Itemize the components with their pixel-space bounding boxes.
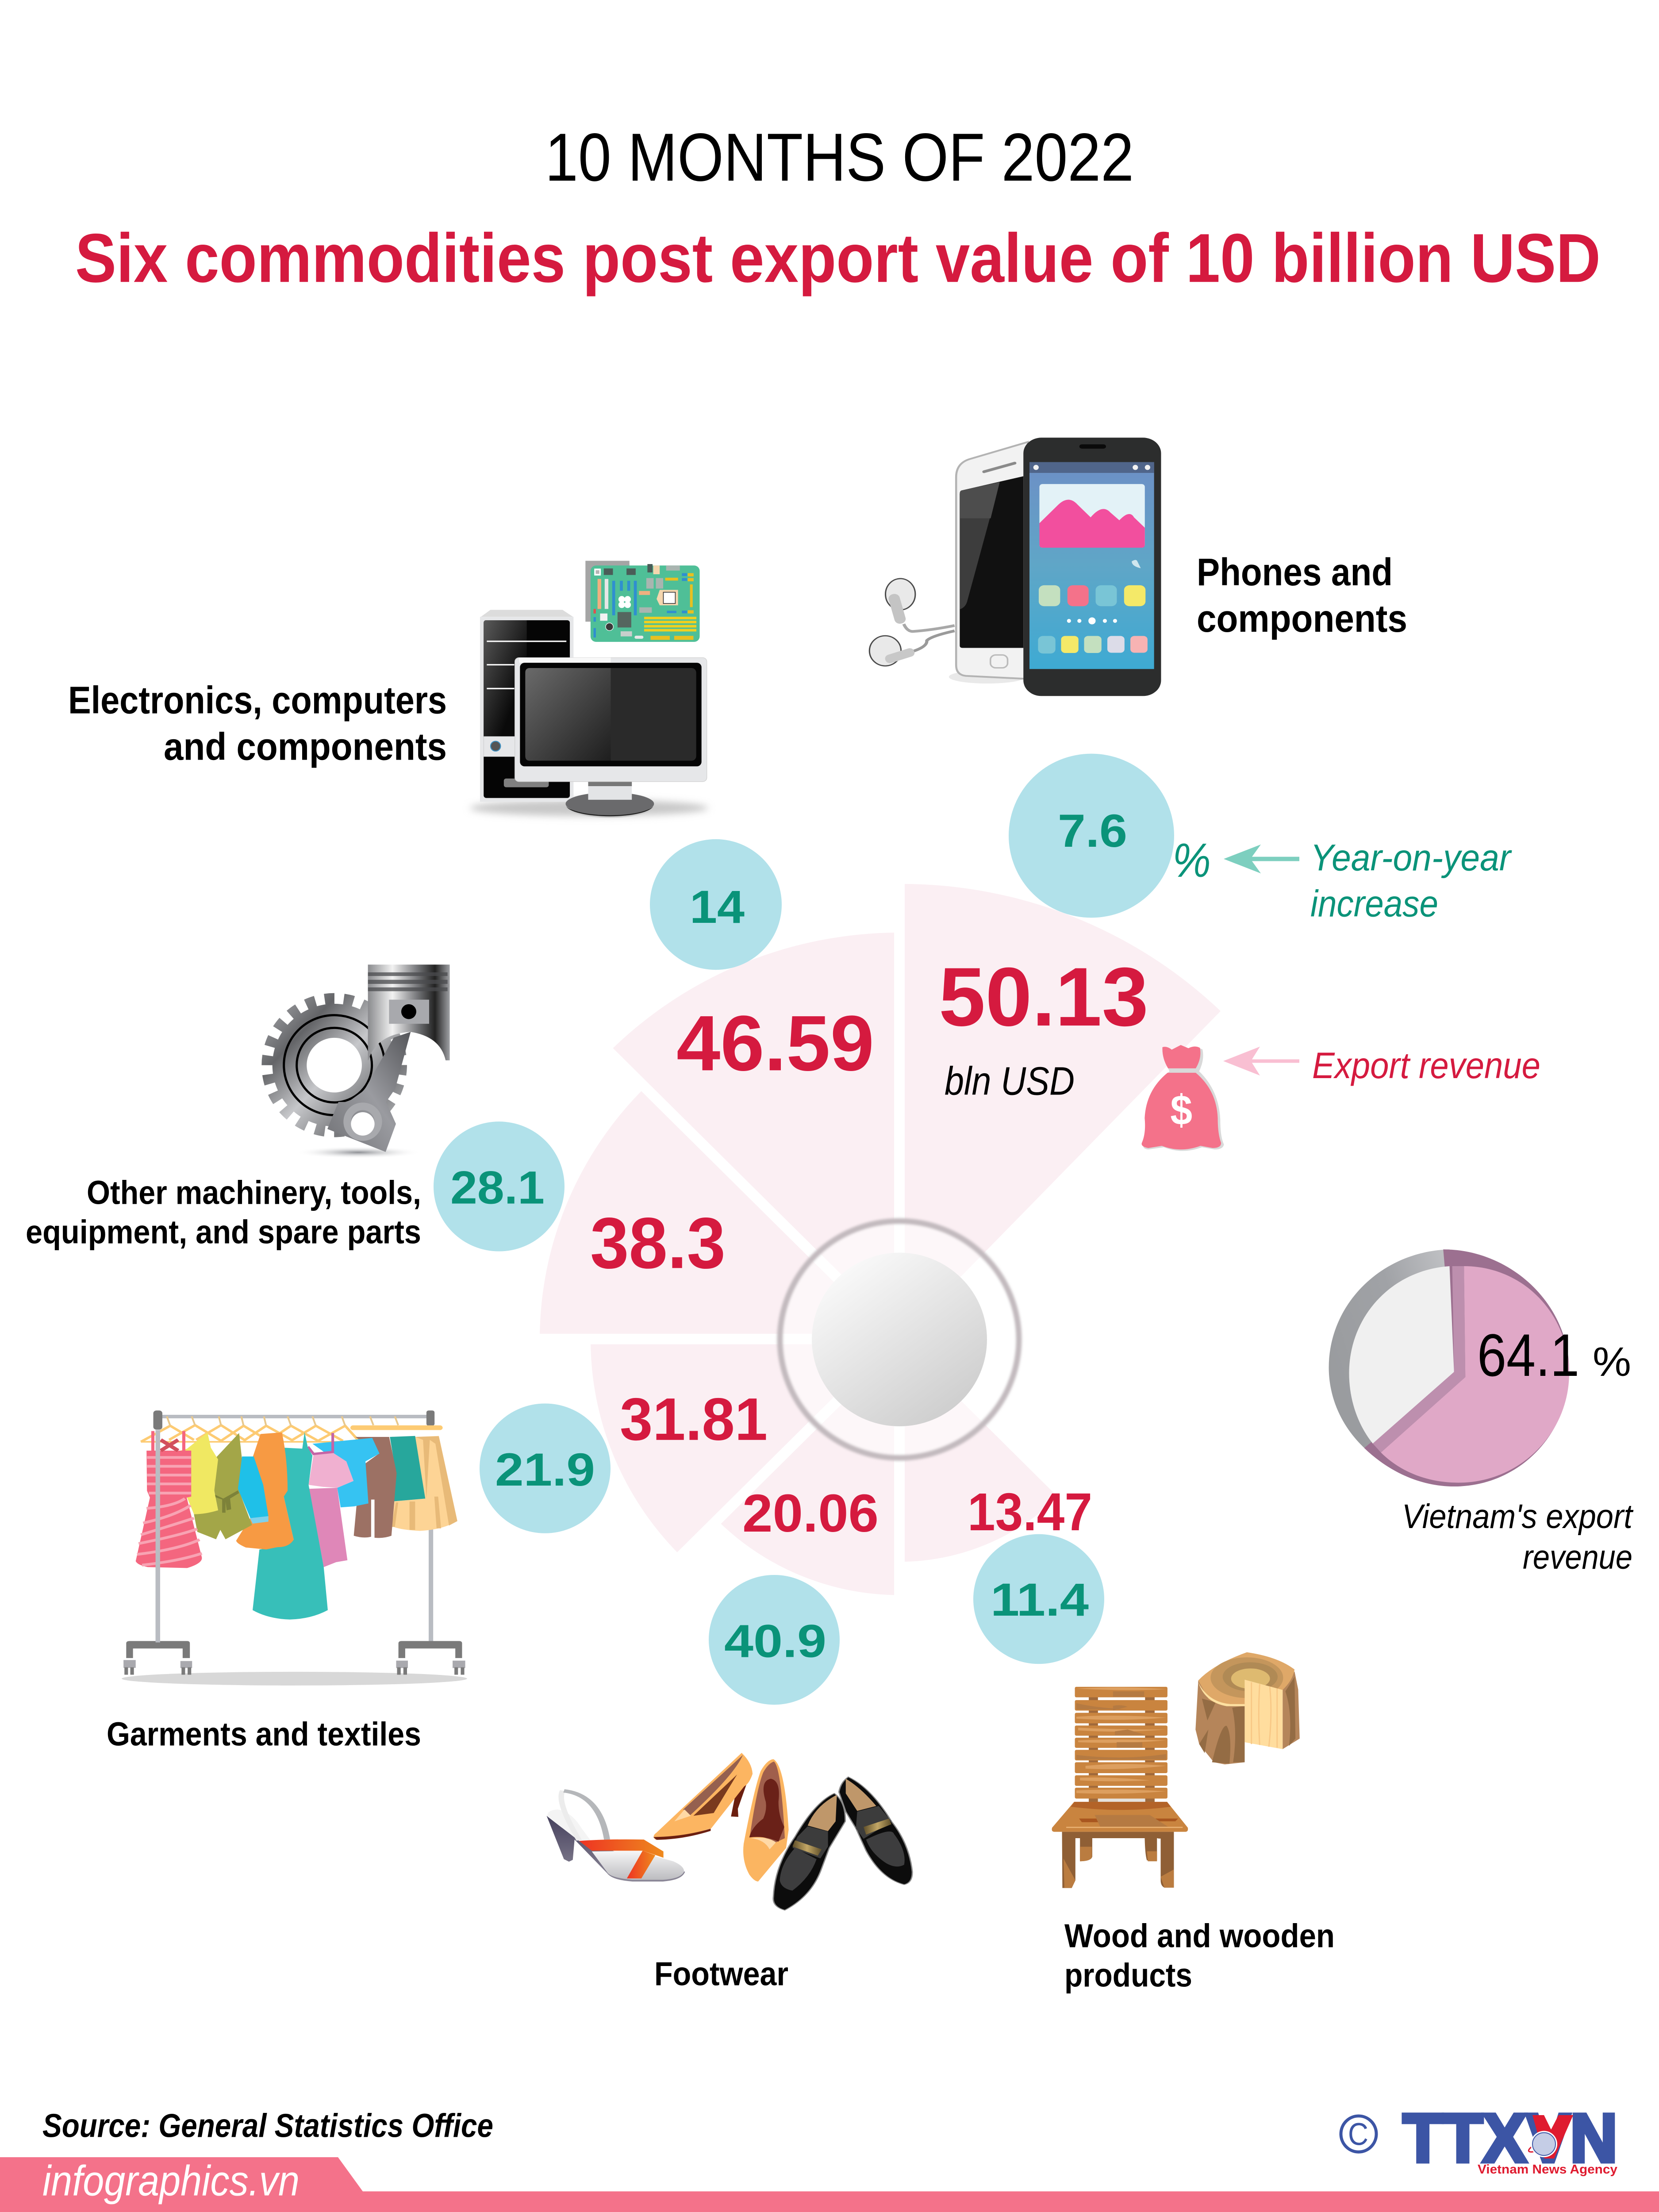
radial sector chart [531, 872, 1221, 1605]
title: period: 10 MONTHS OF 2022 [545, 119, 1134, 195]
footer band [0, 2157, 1659, 2212]
pie caption [1402, 1498, 1634, 1576]
arrow: year-on-year legend [1224, 845, 1299, 873]
legend: year-on-year increase: Year-on-year [1310, 837, 1513, 878]
pie caption: Vietnam's export [1402, 1498, 1634, 1536]
copyright mark: C [1348, 2117, 1368, 2152]
connecting rod [327, 1032, 411, 1152]
pie caption: revenue [1523, 1538, 1632, 1576]
category label: footwear: Footwear [654, 1956, 788, 1993]
growth bubble: wood [973, 1534, 1104, 1664]
category label: electronics: Electronics, computers [68, 679, 447, 722]
category label: wood: Wood and wooden [1064, 1918, 1335, 1955]
growth bubble: electronics: 14 [690, 881, 745, 933]
copyright mark [1341, 2116, 1376, 2152]
sector gaps [531, 872, 899, 1605]
centre ball [812, 1253, 987, 1426]
growth bubble: phones [1009, 754, 1174, 918]
revenue value: garments: 31.81 [620, 1386, 768, 1453]
category label: electronics: and components [164, 725, 447, 768]
chair [1052, 1687, 1188, 1888]
revenue value: electronics: 46.59 [676, 999, 874, 1087]
pie value percent: % [1593, 1338, 1631, 1385]
pie: Vietnam export share [1329, 1249, 1569, 1486]
sector: wood [899, 1340, 1058, 1562]
striped pink dress [136, 1431, 202, 1568]
loafer: left [773, 1793, 845, 1910]
hangers [141, 1417, 440, 1442]
legend: year-on-year increase [1310, 837, 1513, 924]
icon: shoes [547, 1753, 912, 1910]
category label: garments: Garments and textiles [107, 1716, 421, 1753]
category label: machinery: Other machinery, tools, [87, 1175, 421, 1211]
tower [480, 610, 573, 802]
category label: wood: products [1064, 1957, 1192, 1994]
pink dress [308, 1433, 353, 1567]
percent sign for growth: % [1172, 834, 1211, 887]
logo: TTXVN: Vietnam News Agency [1478, 2162, 1617, 2177]
icon: wooden chair and stump [1052, 1652, 1300, 1888]
monitor [515, 658, 707, 818]
category label: phones: components [1197, 597, 1407, 640]
icon: phones and earbuds [869, 438, 1161, 696]
tree stump [1195, 1652, 1300, 1764]
sector: electronics [609, 933, 899, 1340]
arrow: export revenue legend [1223, 1047, 1299, 1075]
icon: gear and piston [268, 964, 450, 1159]
growth bubble: garments: 21.9 [495, 1444, 595, 1496]
growth bubble: phones: 7.6 [1058, 805, 1127, 857]
loafer: right [839, 1777, 912, 1885]
growth bubble: machinery [434, 1121, 565, 1252]
growth bubble: wood: 11.4 [991, 1574, 1089, 1626]
blue tee [312, 1438, 380, 1507]
category label: machinery: equipment, and spare parts [26, 1214, 421, 1251]
category label: machinery [26, 1175, 421, 1251]
blue top [238, 1456, 269, 1524]
skirt: teal [390, 1436, 425, 1502]
growth bubble: footwear: 40.9 [724, 1615, 826, 1667]
category label: phones [1197, 550, 1407, 640]
legend: export revenue: Export revenue [1312, 1045, 1540, 1086]
piston [368, 964, 450, 1060]
centre ring [780, 1221, 1019, 1458]
sandal [547, 1791, 685, 1882]
sector: phones [899, 884, 1221, 1340]
growth bubble: footwear [709, 1575, 840, 1705]
logo: TTXVN: TTXVN [1403, 2100, 1617, 2176]
growth bubble: electronics [650, 839, 782, 970]
category label: phones: Phones and [1197, 550, 1393, 594]
growth bubble: machinery: 28.1 [450, 1162, 545, 1214]
growth bubble: garments [480, 1403, 611, 1533]
icon: money bag: $ [1170, 1087, 1192, 1134]
pump: top view [743, 1759, 789, 1882]
legend: year-on-year increase: increase [1310, 883, 1438, 924]
icon: money bag [1142, 1045, 1224, 1151]
revenue value: wood: 13.47 [968, 1482, 1092, 1542]
source: Source: General Statistics Office [42, 2108, 493, 2144]
circuit board [585, 561, 700, 642]
pump: side view [653, 1753, 753, 1840]
pie value: 64.1 [1477, 1322, 1579, 1389]
revenue value: machinery: 38.3 [590, 1202, 726, 1283]
unit label: bln USD [945, 1059, 1075, 1104]
teal dress [253, 1432, 328, 1620]
olive romper [194, 1433, 252, 1539]
revenue value: footwear: 20.06 [742, 1483, 879, 1543]
yellow top [180, 1432, 218, 1514]
category label: wood [1064, 1918, 1335, 1994]
orange dress [236, 1432, 294, 1549]
footer site name: infographics.vn [42, 2158, 300, 2204]
icon: clothes rack [122, 1410, 467, 1686]
sector: garments [591, 1339, 899, 1556]
category label: electronics [68, 679, 447, 768]
skirt: beige [389, 1436, 457, 1531]
revenue value: phones: 50.13 [939, 951, 1148, 1044]
icon: computer and circuit board [470, 561, 708, 818]
sector: machinery [540, 1087, 899, 1340]
sector: footwear [717, 1340, 899, 1595]
trousers [354, 1437, 397, 1538]
